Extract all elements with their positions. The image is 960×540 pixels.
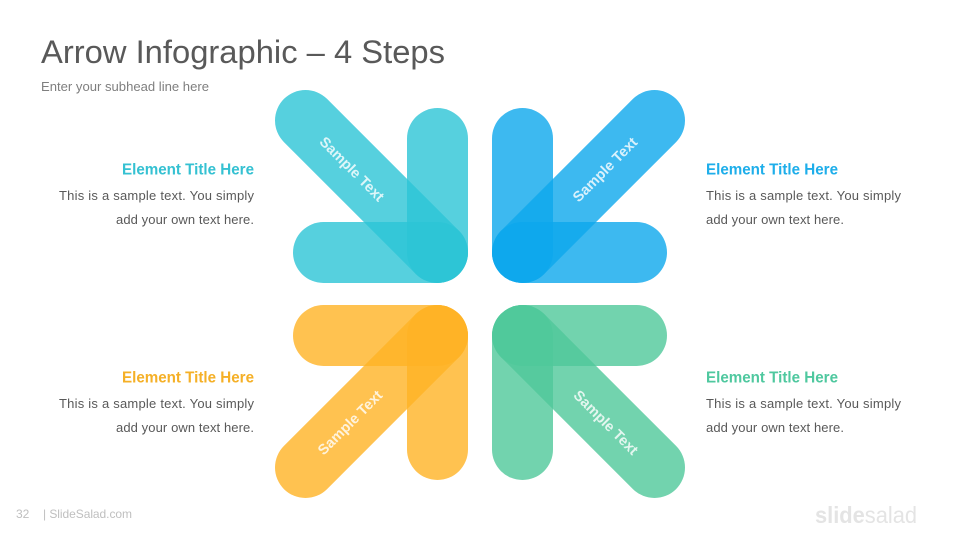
title: Arrow Infographic – 4 Steps xyxy=(41,34,445,70)
text block: bottom-right: add your own text here. xyxy=(706,420,844,435)
arrow: orange bottom-left xyxy=(293,305,468,480)
text block: bottom-left: Element Title Here xyxy=(122,370,254,386)
logo: slidesalad wordmark: slidesalad xyxy=(815,502,917,528)
footer: page number and site: 32 xyxy=(16,507,30,521)
subhead: Enter your subhead line here xyxy=(41,79,209,94)
text block: bottom-left: This is a sample text. You simply xyxy=(59,396,254,411)
text block: bottom-right xyxy=(706,370,902,435)
label: orange arrow: Sample Text xyxy=(315,388,386,459)
arrow: blue top-right xyxy=(492,108,667,283)
text block: bottom-right: Element Title Here xyxy=(706,370,838,386)
text block: top-left: This is a sample text. You simply xyxy=(59,188,254,203)
arrow: green bottom-right xyxy=(492,305,667,480)
text block: top-left: add your own text here. xyxy=(116,212,254,227)
text block: bottom-right: This is a sample text. You simply xyxy=(706,396,902,411)
text block: top-right xyxy=(706,162,902,227)
footer: page number and site: | SlideSalad.com xyxy=(43,507,132,521)
arrow: teal top-left xyxy=(293,108,468,283)
text block: top-right: Element Title Here xyxy=(706,162,838,178)
label: green arrow: Sample Text xyxy=(570,388,641,459)
text block: top-left xyxy=(59,162,254,227)
label: teal arrow: Sample Text xyxy=(316,134,387,205)
label: blue arrow: Sample Text xyxy=(570,135,641,206)
text block: top-right: This is a sample text. You simply xyxy=(706,188,902,203)
text block: top-right: add your own text here. xyxy=(706,212,844,227)
text block: top-left: Element Title Here xyxy=(122,162,254,178)
text block: bottom-left: add your own text here. xyxy=(116,420,254,435)
text block: bottom-left xyxy=(59,370,254,435)
